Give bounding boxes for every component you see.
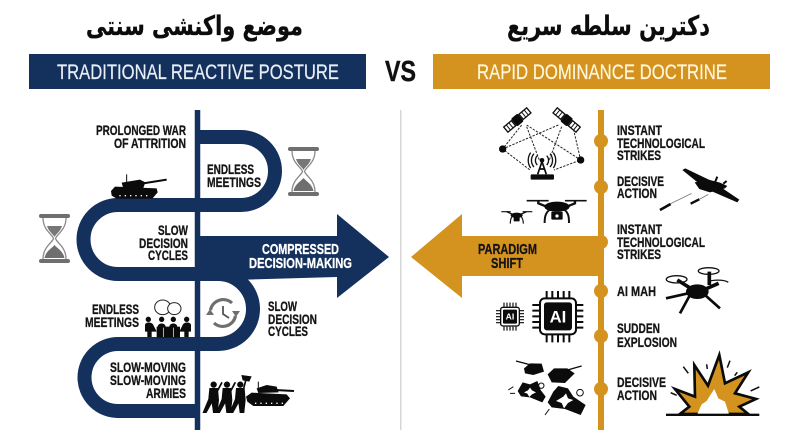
label: slow-moving armies: SLOW-MOVING [110,373,186,388]
label: decisive action 1: DECISIVE [617,174,664,189]
serpentine path [84,110,275,430]
gold arrow: paradigm shift: SHIFT [491,256,523,272]
label: instant technological strikes 1: STRIKES [617,148,661,163]
icon: satellite network [499,107,584,180]
label: prolonged war of attrition [96,123,186,151]
panel: traditional winding path [84,110,389,430]
label: slow decision cycles left: DECISION [139,236,188,251]
arrow: compressed decision-making: DECISION-MAKING [249,256,352,272]
arrow: compressed decision-making [196,214,389,298]
icon: hourglass left [39,214,70,263]
label: slow decision cycles left: SLOW [158,223,188,238]
center divider [400,110,402,430]
label: decisive action 2: DECISIVE [617,375,666,390]
label: endless meetings upper: MEETINGS [207,175,261,190]
icon: tank on path [111,174,167,199]
label: decisive action 1 [617,174,664,201]
label: instant technological strikes 1: TECHNOLOGICAL [617,136,705,151]
icon: AI chips: AI [506,312,514,322]
label: slow decision cycles right [268,299,317,339]
gold arrow: paradigm shift [411,110,604,298]
banner: traditional reactive posture [29,54,366,89]
banner: rapid dominance doctrine: RAPID DOMINANCE DOCTRINE [477,60,727,84]
label: endless meetings upper: ENDLESS [207,162,254,177]
icon: tank lower [246,382,294,406]
icon: quadcopter drone [666,268,728,313]
label: endless meetings lower [85,302,139,330]
title: Persian traditional posture: موضع واکنشی سنتی [86,11,303,42]
label: instant technological strikes 2: STRIKES [617,247,661,262]
label: instant technological strikes 2 [617,222,705,262]
label: endless meetings lower: ENDLESS [92,302,139,317]
label: AI MAH: AI MAH [617,284,656,299]
label: prolonged war of attrition: OF ATTRITION [114,136,186,151]
icon: meeting table with speech bubbles [145,300,191,338]
icon: UAV firing missiles [660,168,739,210]
banner: traditional reactive posture: TRADITIONAL REACTIVE POSTURE [57,60,339,84]
timeline spine with nodes [594,110,608,430]
icon: marching soldiers [203,375,252,413]
icon: destroyed tanks [508,361,586,415]
icon: explosion [666,355,759,416]
label: decisive action 1: ACTION [617,186,657,201]
icon: clock with cycle arrows [206,300,240,326]
label: instant technological strikes 2: TECHNOLOGICAL [617,235,705,250]
label: endless meetings lower: MEETINGS [85,315,139,330]
label: instant technological strikes 2: INSTANT [617,222,663,237]
icon: AI chips [496,291,583,342]
label: slow-moving armies [110,360,186,401]
label: slow decision cycles right: SLOW [268,299,297,314]
label: slow decision cycles left [139,223,188,263]
icon: AI chips: AI [550,307,566,326]
icon: hourglass upper [288,147,319,196]
label: endless meetings upper [207,162,261,190]
label: sudden explosion [617,321,677,350]
banner: rapid dominance doctrine [433,54,770,89]
label: instant technological strikes 1 [617,123,705,163]
label: slow decision cycles right: DECISION [268,312,317,327]
label: sudden explosion: SUDDEN [617,321,660,336]
panel: rapid dominance timeline [411,110,705,430]
label: decisive action 2 [617,375,666,403]
title: Persian rapid dominance: دکترین سلطه سریع [507,11,710,42]
label: slow decision cycles left: CYCLES [148,248,188,263]
VS label: VS [385,56,416,88]
label: slow-moving armies: ARMIES [146,386,186,401]
label: prolonged war of attrition: PROLONGED WAR [96,123,186,138]
gold arrow: paradigm shift: PARADIGM [478,242,537,258]
label: decisive action 2: ACTION [617,388,657,403]
label: slow-moving armies: SLOW-MOVING [110,360,186,375]
label: instant technological strikes 1: INSTANT [617,123,663,138]
icon: two quadcopter drones [501,201,587,224]
label: slow decision cycles right: CYCLES [268,324,308,339]
label: sudden explosion: EXPLOSION [617,335,677,350]
arrow: compressed decision-making: COMPRESSED [262,242,339,258]
